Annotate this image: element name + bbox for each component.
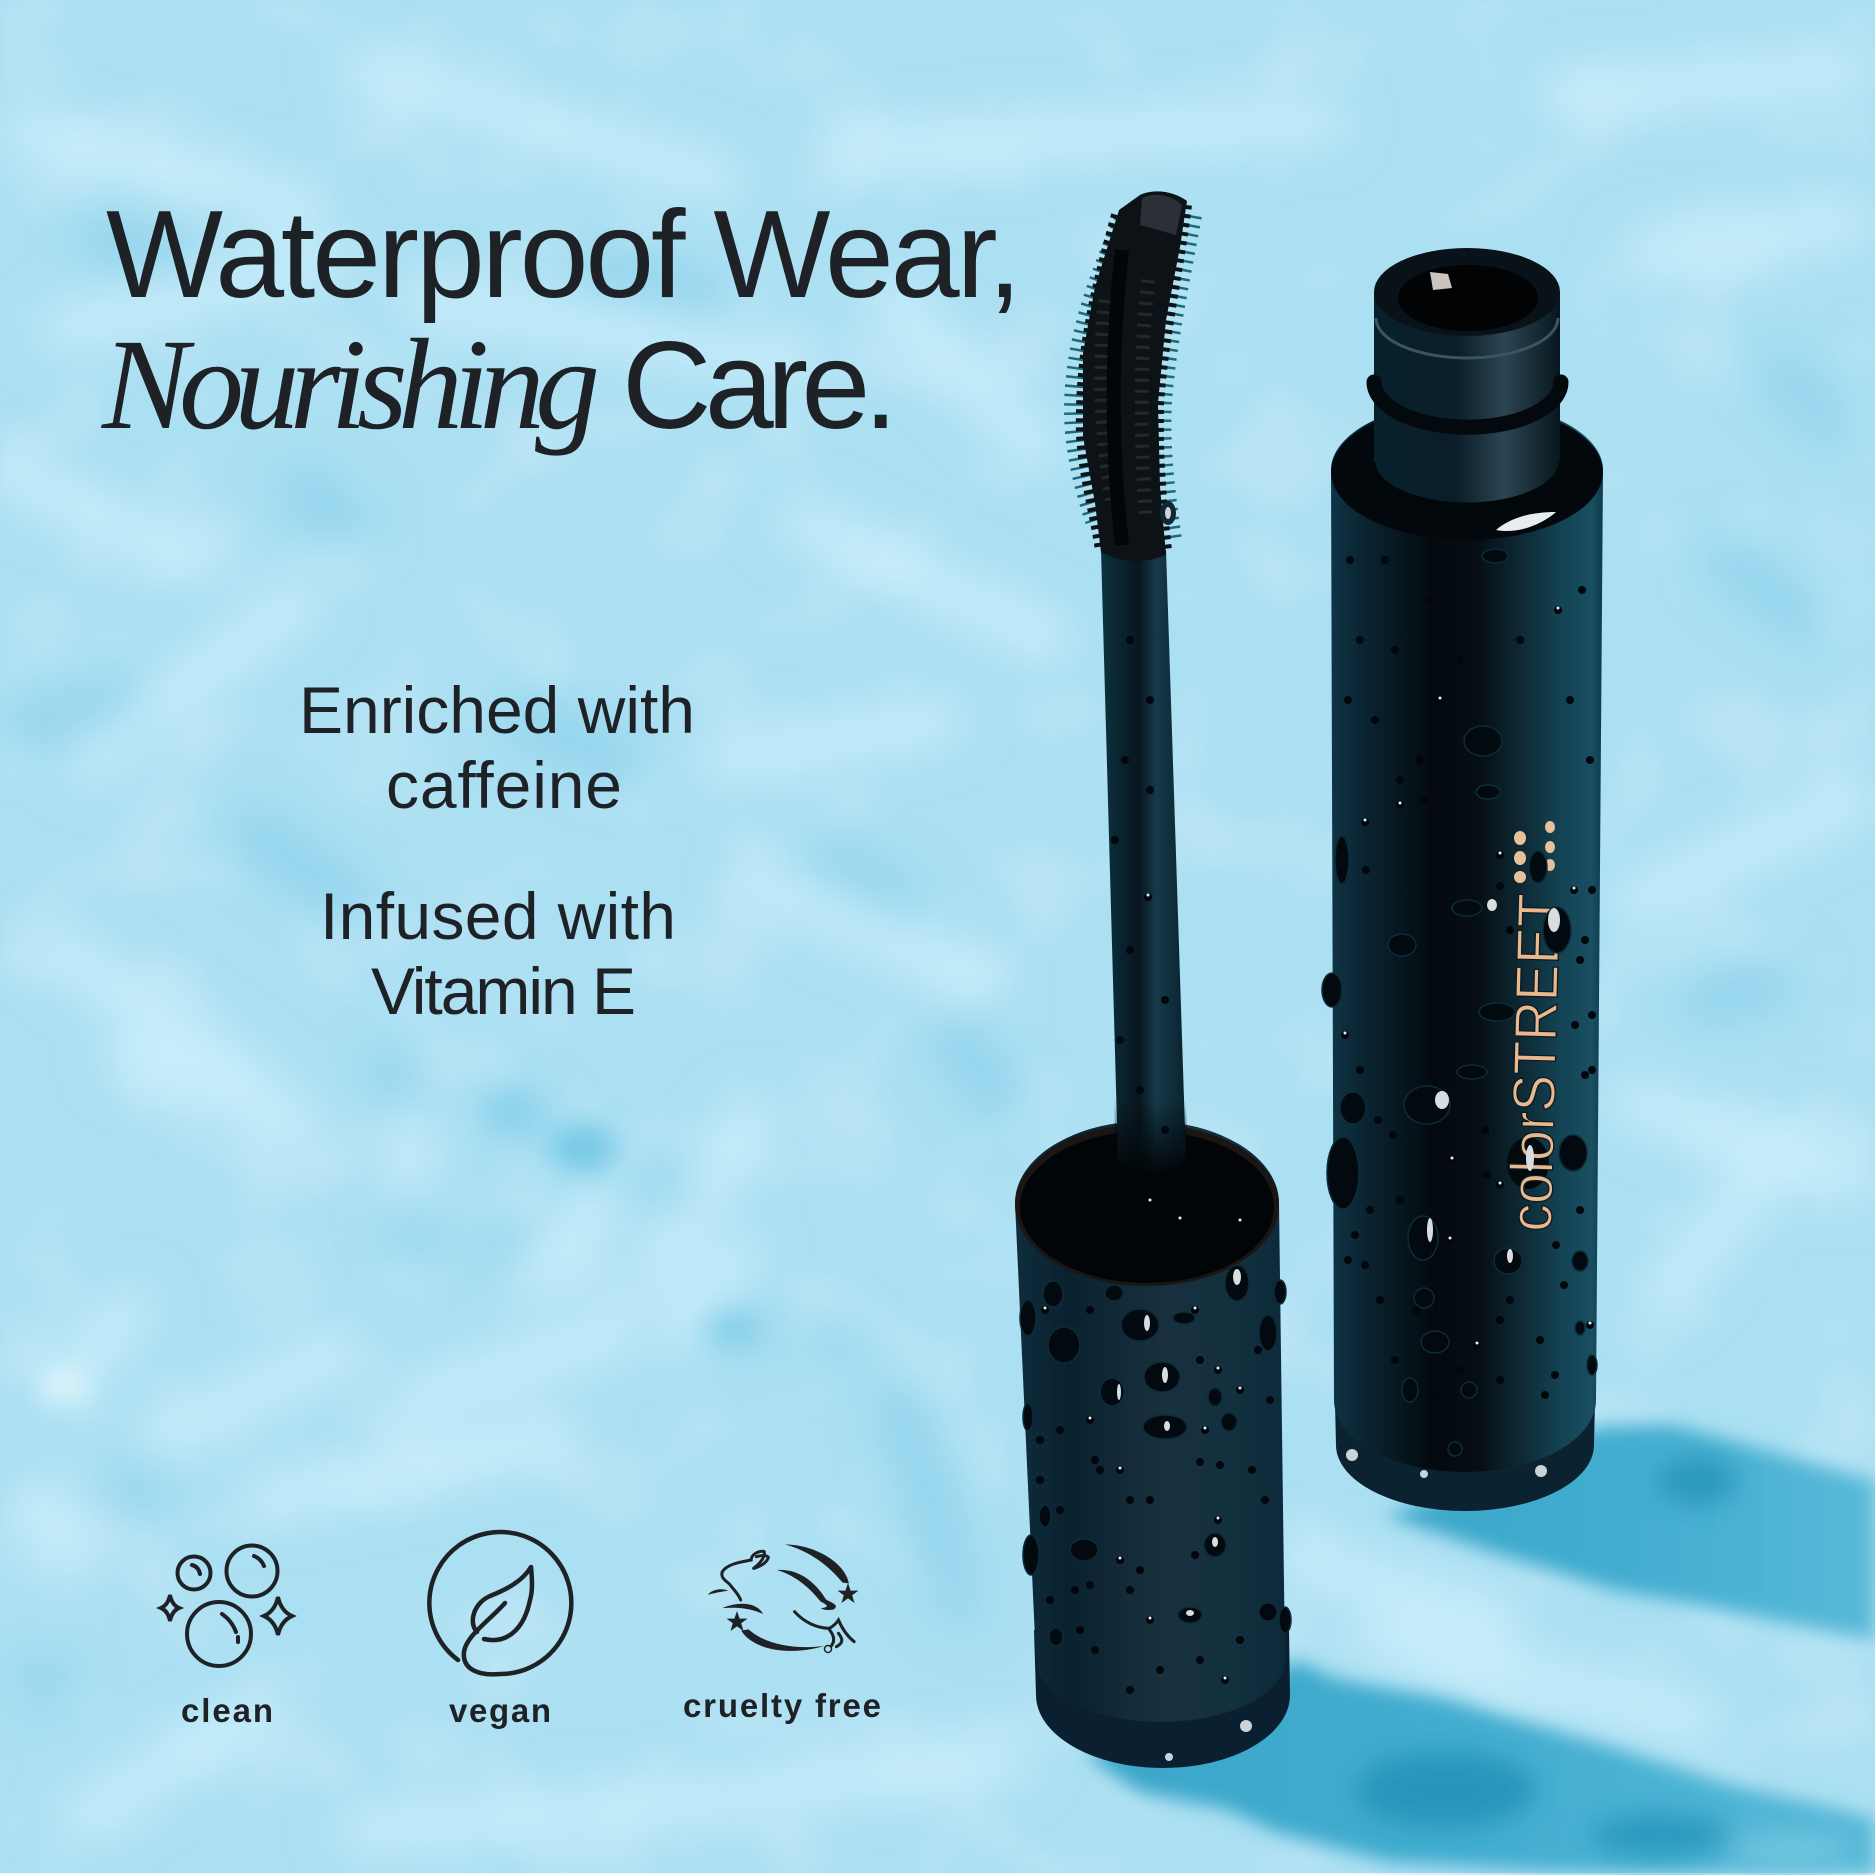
logo dots xyxy=(1514,821,1555,883)
tube base ring xyxy=(1334,1360,1596,1511)
rod base shadow xyxy=(1114,1100,1188,1176)
benefit: vitamin E xyxy=(320,879,676,1028)
large droplets xyxy=(1020,549,1597,1646)
benefit: caffeine xyxy=(299,673,695,822)
tube thread ring xyxy=(1374,382,1561,427)
wand rod xyxy=(1101,550,1186,1172)
tube body xyxy=(1331,402,1603,1472)
tube neck and collar xyxy=(1374,292,1560,504)
benefit: vitamin E: Vitamin E xyxy=(371,954,636,1028)
droplet highlights xyxy=(1117,899,1560,1616)
title line 1: Waterproof Wear, xyxy=(106,186,1022,324)
badge: cruelty free xyxy=(683,1544,881,1724)
brush edge fibres xyxy=(1082,205,1186,550)
benefit: caffeine: Enriched with xyxy=(299,673,695,747)
cap opening xyxy=(1015,1124,1279,1286)
title line 2: Care. xyxy=(622,317,898,455)
title line 2: Nourishing xyxy=(101,313,600,457)
water droplets xyxy=(1020,549,1597,1761)
mascara tube xyxy=(1331,248,1603,1511)
bottle shadows on water xyxy=(1085,1424,1875,1873)
tube shoulder highlight xyxy=(1496,512,1556,531)
tiny droplets xyxy=(1040,560,1592,1690)
tube neck lower rim xyxy=(1372,462,1562,506)
brush bristles xyxy=(1077,215,1190,540)
tube shoulder xyxy=(1331,404,1603,540)
tube opening xyxy=(1398,265,1538,331)
wand cap xyxy=(1015,1121,1290,1768)
benefit: caffeine: caffeine xyxy=(386,748,622,822)
product logo xyxy=(1497,821,1573,1232)
tube opening glint xyxy=(1430,272,1452,290)
label: clean: clean xyxy=(181,1692,273,1729)
mascara wand xyxy=(1077,191,1190,1176)
droplet under logo xyxy=(1507,1137,1549,1189)
wand droplet xyxy=(1160,501,1176,525)
title xyxy=(101,186,1022,457)
label: vegan: vegan xyxy=(449,1692,551,1729)
badge: vegan xyxy=(429,1532,571,1729)
badge: clean xyxy=(161,1546,292,1729)
cap opening inner xyxy=(1020,1131,1274,1283)
cap body xyxy=(1015,1121,1285,1722)
logo wordmark: colorSTREET xyxy=(1497,893,1573,1232)
icon: leaf in circle xyxy=(429,1532,571,1674)
benefit: vitamin E: Infused with xyxy=(320,879,676,953)
icon: bubbles xyxy=(161,1546,292,1666)
cap base ring xyxy=(1034,1630,1290,1768)
label: cruelty free: cruelty free xyxy=(683,1687,881,1724)
tube collar bottom edge xyxy=(1376,318,1558,358)
base droplets xyxy=(1165,1449,1547,1761)
tube collar rim xyxy=(1374,248,1560,336)
brush head xyxy=(1083,191,1187,561)
brush head texture xyxy=(1140,195,1182,235)
icon: leaping bunny xyxy=(708,1544,858,1652)
